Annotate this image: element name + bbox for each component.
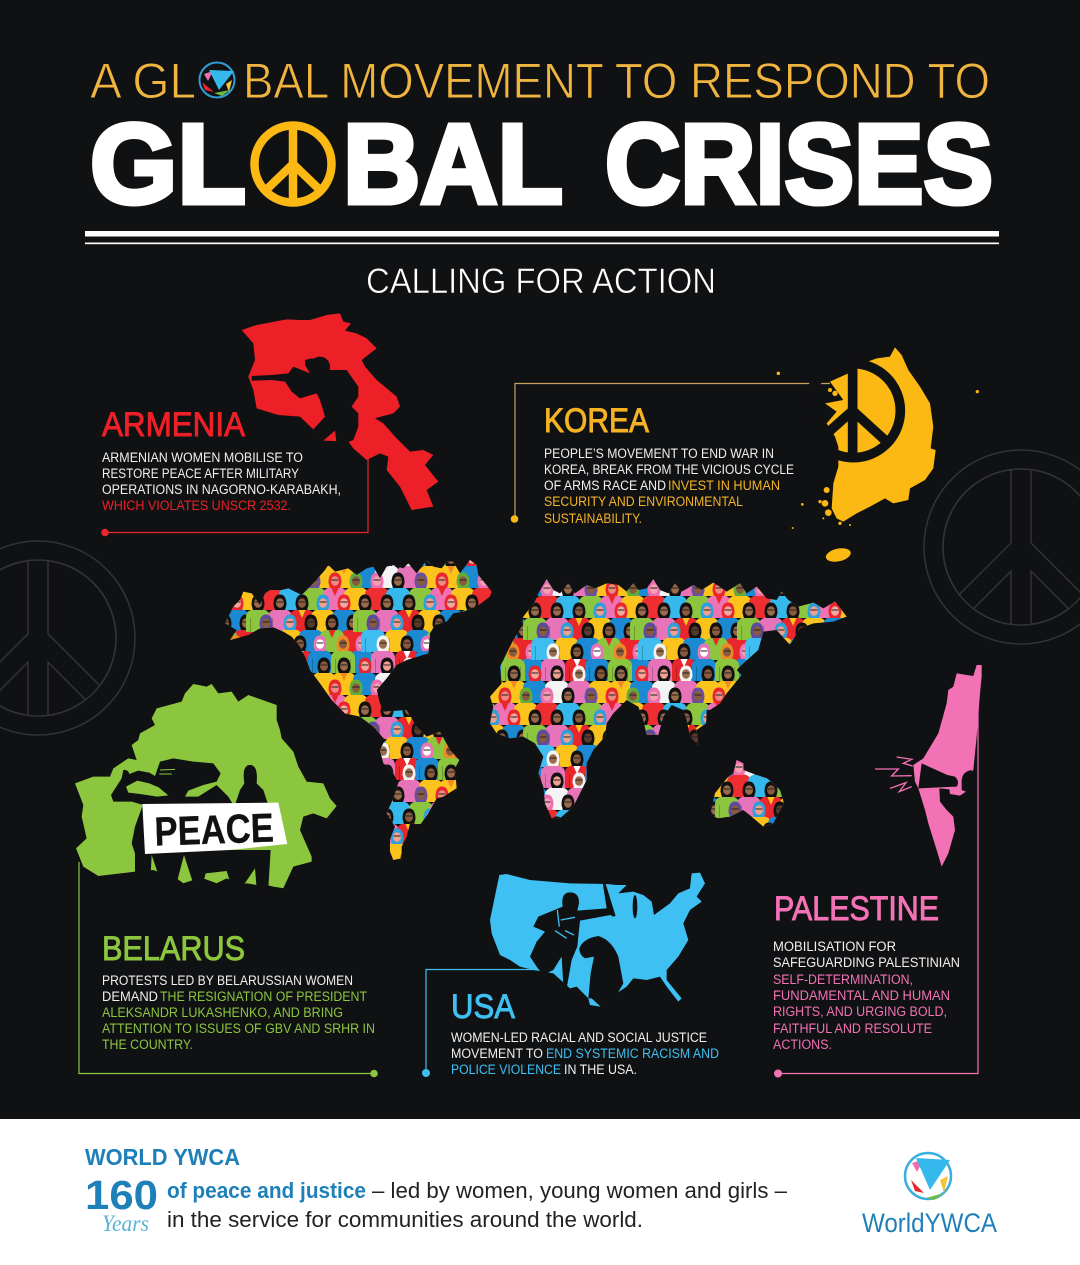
usa callout line [423,970,536,1076]
footer statement: in the service for communities around the world. [167,1207,643,1232]
peace sign cut-out [806,363,900,458]
belarus text: ATTENTION TO ISSUES OF GBV AND SRHR IN [102,1021,375,1036]
belarus text: DEMAND [102,989,158,1004]
armenia callout line [102,458,368,536]
belarus text: THE RESIGNATION OF PRESIDENT [160,989,367,1004]
palestine text: MOBILISATION FOR [773,939,896,954]
belarus callout line [79,862,377,1077]
footer panel [0,1119,1080,1265]
footer heading: WORLD YWCA [85,1144,240,1170]
palestine text: FAITHFUL AND RESOLUTE [773,1021,932,1036]
ghost peace sign left [0,541,135,735]
title line: a global movement to respond to: A GL [90,53,196,109]
usa text: IN THE USA. [564,1062,637,1077]
korea callout line [511,384,830,522]
usa heading: USA [451,988,515,1026]
subtitle: CALLING FOR ACTION [366,262,716,301]
title line: a global movement to respond to: BAL MOVEMENT TO RESPOND TO [243,53,990,109]
title: GLOBAL CRISES: CRISES [605,101,993,227]
map: armenia with soldier [242,313,438,510]
armenia heading: ARMENIA [102,406,245,444]
korea text: INVEST IN HUMAN [668,478,780,493]
sound waves [875,757,913,792]
belarus heading: BELARUS [102,930,245,968]
title: GLOBAL CRISES [90,101,993,227]
belarus text: THE COUNTRY. [102,1037,193,1052]
armenia text [102,450,341,513]
armenia text: RESTORE PEACE AFTER MILITARY [102,466,299,481]
usa text [451,1030,719,1077]
icon: World YWCA globe in title [200,62,234,98]
runner silhouette [530,882,616,988]
160 years mark: 160 [85,1172,158,1218]
palestine text: SAFEGUARDING PALESTINIAN [773,955,960,970]
footer statement: of peace and justice [167,1178,366,1203]
palestine text: RIGHTS, AND URGING BOLD, [773,1004,947,1019]
map: palestine with megaphone [875,665,982,867]
korea text [544,446,794,526]
160 years mark: Years [102,1211,149,1236]
footer statement [167,1178,788,1232]
usa text: WOMEN-LED RACIAL AND SOCIAL JUSTICE [451,1030,707,1045]
peace banner: PEACE [154,805,275,855]
world map made of people [225,560,847,860]
usa text: MOVEMENT TO [451,1046,543,1061]
world ywca logo [862,1153,997,1238]
belarus text [102,973,375,1052]
belarus text: PROTESTS LED BY BELARUSSIAN WOMEN [102,973,353,988]
ghost peace sign right [924,450,1080,644]
160 years mark [85,1172,158,1236]
protesters silhouette [111,758,271,888]
belarus text: ALEKSANDR LUKASHENKO, AND BRING [102,1005,343,1020]
australia [710,760,784,827]
megaphone silhouette [918,763,958,788]
title: GLOBAL CRISES: BAL [343,101,563,227]
usa text: POLICE VIOLENCE [451,1062,561,1077]
world ywca logo: WorldYWCA [862,1208,997,1238]
palestine heading: PALESTINE [774,890,939,928]
armenia text: ARMENIAN WOMEN MOBILISE TO [102,450,303,465]
palestine callout line [775,700,978,1077]
palestine text [773,939,960,1052]
korea text: PEOPLE’S MOVEMENT TO END WAR IN [544,446,774,461]
map: korea with peace sign [777,347,979,564]
korea text: OF ARMS RACE AND [544,478,666,493]
usa text: END SYSTEMIC RACISM AND [546,1046,719,1061]
title rules [85,231,999,244]
soldier silhouette [252,357,358,443]
americas [225,560,492,860]
korea heading: KOREA [544,402,649,440]
map: belarus with protesters [75,684,337,888]
armenia text: OPERATIONS IN NAGORNO-KARABAKH, [102,482,341,497]
armenia text: WHICH VIOLATES UNSCR 2532. [102,498,291,513]
palestine text: FUNDAMENTAL AND HUMAN [773,988,950,1003]
icon: yellow peace sign in title [254,126,332,202]
kneeling figure silhouette [579,936,623,1007]
palestine text: ACTIONS. [773,1037,832,1052]
korea text: SECURITY AND ENVIRONMENTAL [544,494,743,509]
title: GLOBAL CRISES: GL [90,101,246,227]
map: usa with runner [490,873,705,1007]
korea text: KOREA, BREAK FROM THE VICIOUS CYCLE [544,462,794,477]
korea text: SUSTAINABILITY. [544,511,642,526]
palestine text: SELF-DETERMINATION, [773,972,913,987]
eurasia and africa [490,579,847,818]
footer statement: – led by women, young women and girls – [372,1178,788,1203]
